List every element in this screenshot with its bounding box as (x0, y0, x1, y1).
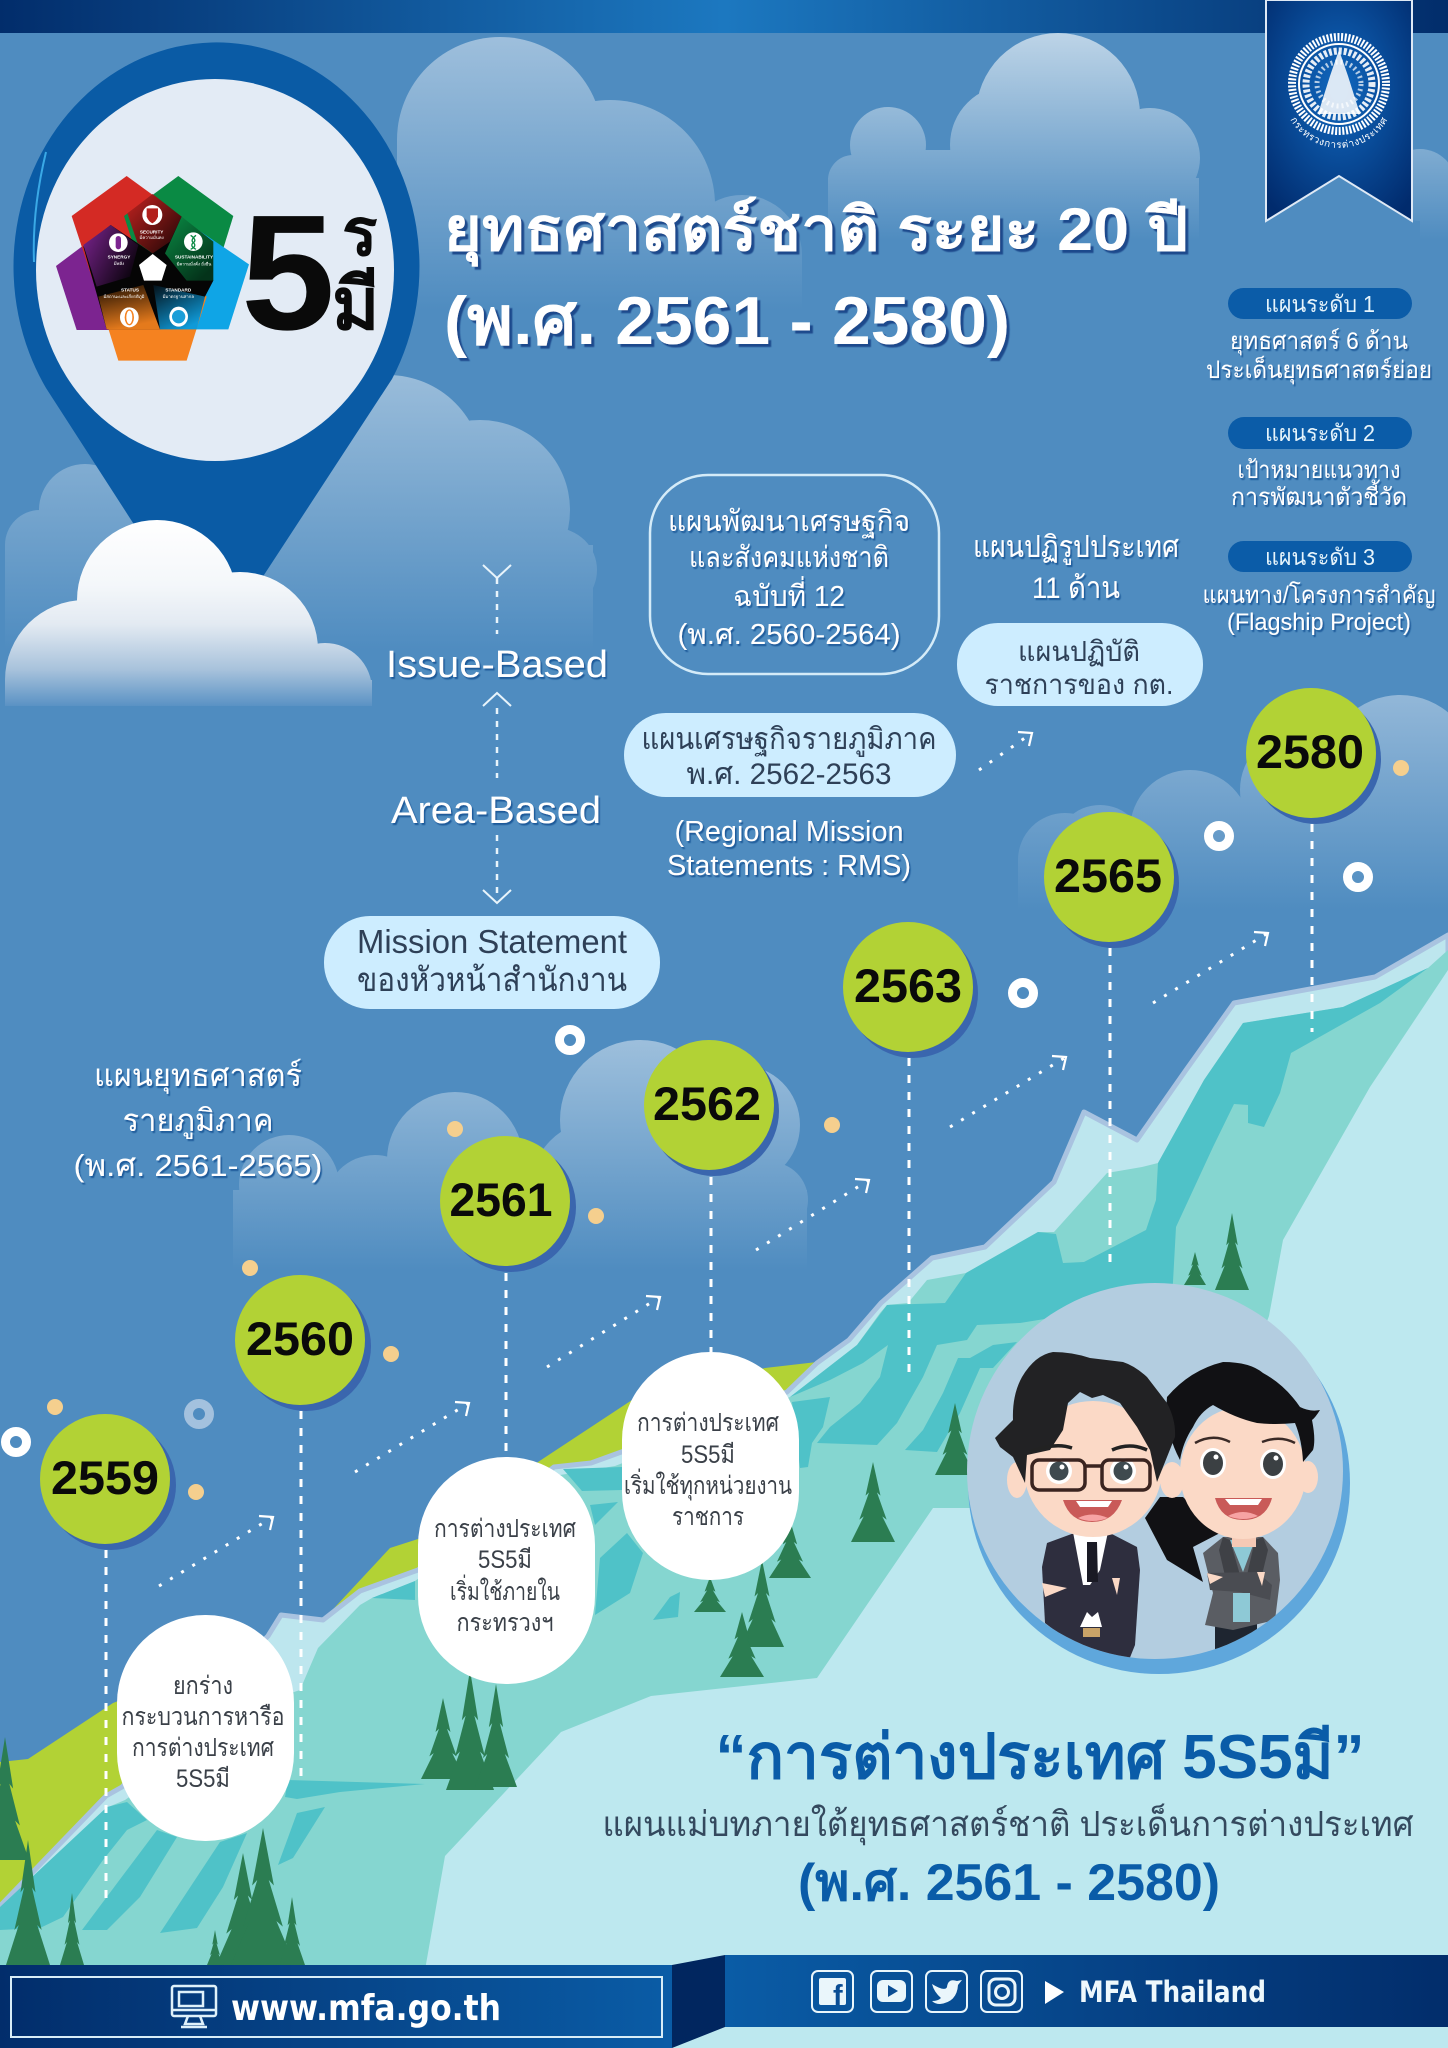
year 2565 (1044, 812, 1179, 948)
plan level 3: (Flagship Project) (1227, 609, 1411, 636)
area-based label: Area-Based (391, 790, 601, 832)
logo labels: SECURITY (140, 229, 164, 234)
logo icon inner marks (116, 208, 196, 325)
bubble: draft (117, 1615, 294, 1841)
cloud: behind 2561 and 2562 (233, 1040, 808, 1270)
year 2580 (1246, 688, 1381, 824)
mountain: pale ridge (0, 935, 1448, 1970)
bubble: all agencies: เริ่มใช้ทุกหน่วยงาน (624, 1468, 792, 1501)
bubble: ministry use: 5S5มี (478, 1546, 532, 1574)
cloud: behind 2565 and 2580 (1018, 695, 1448, 910)
bubble: draft: กระบวนการหารือ (122, 1703, 284, 1731)
national economic plan box: (พ.ศ. 2560-2564) (678, 619, 900, 651)
title (444, 196, 1188, 359)
instagram icon (981, 1971, 1022, 2012)
plan level 3: แผนระดับ 3 (1265, 544, 1375, 570)
cloud: middle left (5, 375, 597, 650)
regional economic plan pill (624, 713, 956, 797)
national economic plan box: ฉบับที่ 12 (733, 576, 845, 613)
plan level 3 (1202, 541, 1436, 636)
mountain: mint slope (0, 950, 1448, 1970)
bubble: ministry use: การต่างประเทศ (434, 1515, 576, 1543)
year 2561 (440, 1136, 576, 1272)
man character (995, 1352, 1184, 1670)
website url: www.mfa.go.th (231, 1988, 501, 2029)
regional strategy plan: แผนยุทธศาสตร์ (94, 1058, 302, 1095)
regional mission statements: Statements : RMS) (667, 850, 911, 882)
regional economic plan pill: แผนเศรษฐกิจรายภูมิภาค (642, 723, 936, 757)
computer icon (172, 1986, 216, 2027)
year 2560 (235, 1275, 371, 1411)
logo wordmark 5: 5 (241, 181, 335, 364)
MFA action plan pill: ราชการของ กต. (984, 669, 1174, 700)
plan level 3: แผนทาง/โครงการสำคัญ (1202, 581, 1436, 609)
year 2565: 2565 (1054, 849, 1162, 902)
ring markers (6, 826, 1368, 1452)
plan level 1: ประเด็นยุทธศาสตร์ย่อย (1206, 355, 1432, 385)
bubble: draft: ยกร่าง (173, 1672, 233, 1700)
plan level 2: การพัฒนาตัวชี้วัด (1231, 479, 1407, 511)
national economic plan box: แผนพัฒนาเศรษฐกิจ (668, 506, 910, 539)
cloud: top right (828, 33, 1200, 240)
MFA action plan pill: แผนปฏิบัติ (1018, 636, 1140, 667)
logo labels: SUSTAINABILITY (175, 255, 214, 260)
footer website panel (0, 1965, 672, 2048)
footer social panel (725, 1955, 1448, 2027)
year 2580: 2580 (1256, 725, 1364, 778)
plan level 2: เป้าหมายแนวทาง (1238, 457, 1400, 484)
regional strategy plan (74, 1058, 322, 1183)
footer base (0, 1970, 1448, 2048)
foreground white cloud (5, 520, 372, 706)
logo wordmark ร: ร (342, 195, 377, 269)
MFA action plan pill (957, 623, 1203, 706)
year 2563 (843, 922, 978, 1058)
ministry seal (1288, 33, 1390, 148)
logo sublabels: มีความมั่นคง (139, 234, 164, 240)
logo sublabels (103, 234, 211, 300)
foreground pale slope (425, 970, 1448, 1970)
character circle (967, 1283, 1350, 1674)
mountain: lime slope (0, 1362, 817, 1925)
logo labels: STATUS (121, 288, 139, 293)
twitter icon (926, 1971, 967, 2012)
youtube icon (871, 1971, 912, 2012)
title: (พ.ศ. 2561 - 2580) (444, 283, 1010, 359)
logo wordmark มี: มี (332, 265, 379, 345)
ministry banner (1265, 0, 1413, 223)
year 2561: 2561 (450, 1173, 552, 1226)
seal caption: กระทรวงการต่างประเทศ (1290, 116, 1388, 148)
mission statement pill: Mission Statement (357, 923, 627, 960)
mission statement pill (324, 916, 660, 1009)
pin inner circle (36, 79, 394, 461)
woman character (1145, 1362, 1320, 1656)
dotted diagonal arrows (159, 732, 1268, 1586)
location pin (13, 42, 419, 650)
mission statement pill: ของหัวหน้าสำนักงาน (357, 961, 627, 998)
logo labels: SYNERGY (108, 254, 131, 259)
logo labels (108, 229, 214, 293)
year 2560: 2560 (246, 1312, 354, 1365)
logo sublabels: มีพลัง (114, 261, 124, 266)
pin highlight (34, 152, 46, 262)
year 2563: 2563 (854, 959, 962, 1012)
timeline dashed lines (106, 824, 1312, 1899)
bubble: all agencies: การต่างประเทศ (637, 1409, 779, 1437)
year 2559 (40, 1414, 176, 1550)
regional strategy plan: (พ.ศ. 2561-2565) (74, 1148, 322, 1183)
regional mission statements: (Regional Mission (674, 816, 904, 848)
bubble: draft: การต่างประเทศ (132, 1734, 274, 1762)
issue-based label: Issue-Based (386, 644, 608, 686)
plan level 1: แผนระดับ 1 (1265, 291, 1375, 317)
MFA Thailand label: MFA Thailand (1079, 1975, 1266, 2009)
year 2562 (644, 1040, 779, 1176)
play triangle (1045, 1981, 1064, 2004)
national economic plan box (650, 475, 939, 674)
plan level 1 (1206, 288, 1432, 385)
bubble: all agencies: 5S5มี (681, 1441, 735, 1469)
bubble: all agencies: ราชการ (672, 1503, 744, 1531)
year 2559: 2559 (51, 1451, 159, 1504)
logo sublabels: มีความมั่งคั่ง ยั่งยืน (176, 261, 211, 267)
logo sublabels: มีสถานะและเกียรติภูมิ (103, 294, 145, 300)
title: ยุทธศาสตร์ชาติ ระยะ 20 ปี (444, 196, 1188, 267)
national economic plan box: และสังคมแห่งชาติ (689, 542, 889, 574)
regional economic plan pill: พ.ศ. 2562-2563 (686, 758, 892, 791)
facebook icon (812, 1971, 853, 2012)
5S5มี logo pentagons (56, 176, 249, 361)
year 2562: 2562 (653, 1077, 761, 1130)
bubble: ministry use: เริ่มใช้ภายใน (450, 1574, 560, 1606)
bottom heading: “การต่างประเทศ 5S5มี” (716, 1723, 1364, 1792)
bubble: ministry use: กระทรวงฯ (456, 1609, 554, 1637)
top bar (0, 0, 1448, 33)
vertical arrows between issue and area (483, 565, 511, 903)
cloud: far right behind banner (1384, 149, 1448, 240)
cloud: top centre (397, 37, 802, 315)
logo sublabels: มีมาตรฐานสากล (162, 294, 194, 300)
logo icon circles (109, 205, 203, 327)
national reform plan: 11 ด้าน (1032, 572, 1120, 605)
tan dots (47, 760, 1409, 1500)
bubble: draft: 5S5มี (176, 1765, 230, 1793)
plan level 2 (1228, 417, 1412, 511)
bottom subtitle: แผนแม่บทภายใต้ยุทธศาสตร์ชาติ ประเด็นการต่างประเทศ (602, 1803, 1414, 1845)
regional mission statements (667, 816, 911, 882)
footer fold (672, 1955, 725, 2048)
plan level 1: ยุทธศาสตร์ 6 ด้าน (1230, 327, 1408, 356)
national reform plan: แผนปฏิรูปประเทศ (973, 531, 1179, 565)
regional strategy plan: รายภูมิภาค (122, 1103, 274, 1139)
bubble: ministry use (418, 1457, 595, 1684)
national reform plan (973, 531, 1179, 605)
bubble: all agencies (622, 1352, 799, 1580)
logo labels: STANDARD (165, 288, 192, 293)
mountain: teal facets (0, 968, 1428, 1933)
facebook icon: f (833, 1980, 843, 2012)
pine trees (0, 1213, 1249, 1965)
bottom years: (พ.ศ. 2561 - 2580) (798, 1854, 1220, 1912)
plan level 2: แผนระดับ 2 (1265, 420, 1375, 446)
